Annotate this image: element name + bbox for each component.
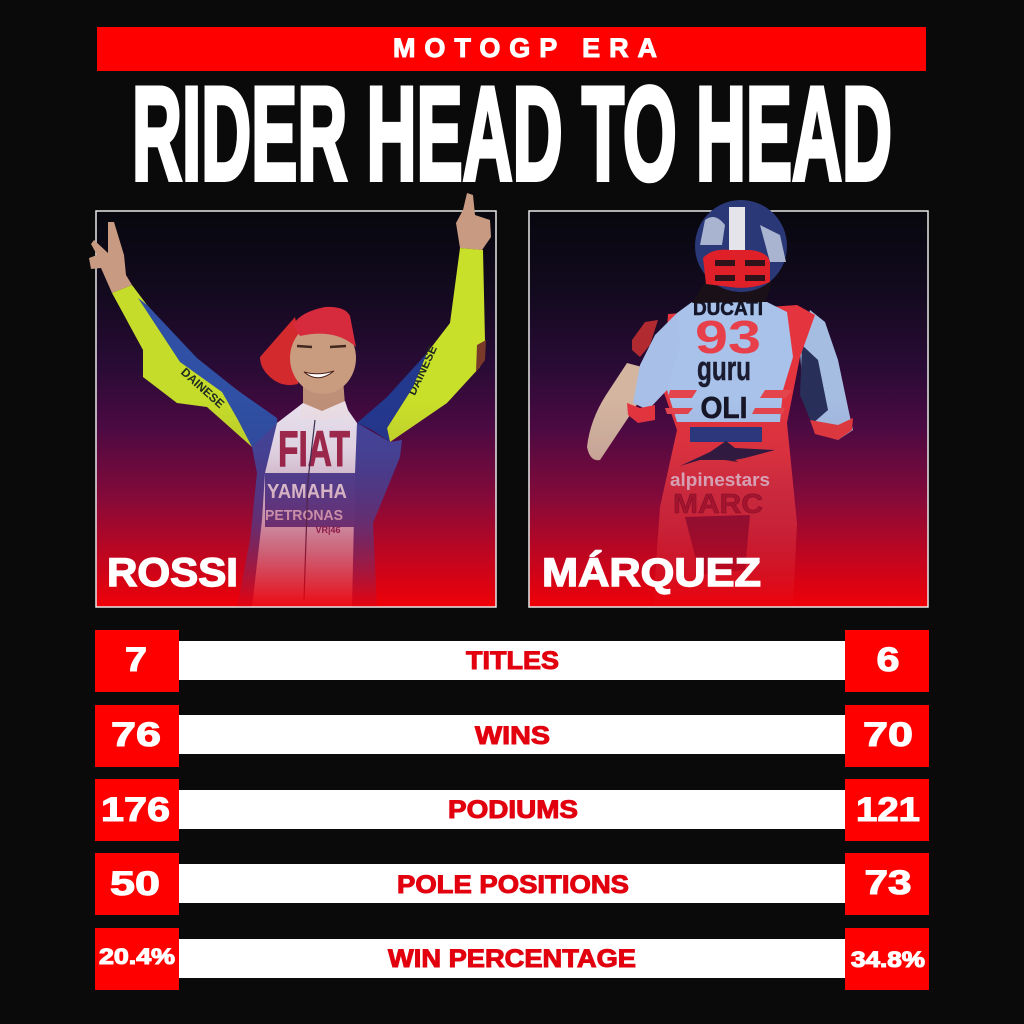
eyes and smile [297, 346, 346, 347]
left arm blue [633, 313, 680, 410]
stat row: pole positions [95, 853, 929, 915]
sponsor block [265, 473, 355, 527]
stripes [665, 390, 792, 414]
torso base [237, 423, 402, 607]
race number 93: 93 [695, 311, 761, 363]
stat row: podiums: 121 [856, 791, 920, 829]
right hand [456, 193, 491, 250]
left hand [89, 222, 132, 293]
helmet [695, 200, 787, 292]
face [290, 334, 356, 394]
sponsor text OLI: OLI [700, 390, 748, 425]
sponsor text guru: guru [697, 350, 751, 388]
sponsor text FIAT: FIAT [278, 421, 350, 477]
forearm [587, 363, 642, 460]
zip [304, 420, 315, 600]
right sleeve [387, 248, 485, 442]
header banner: MotoGP era [97, 27, 926, 71]
panel: Márquez [529, 200, 928, 607]
left shoulder blue [138, 298, 278, 447]
cap [293, 307, 356, 347]
sponsor text Dainese left sleeve: DAINESE [178, 365, 227, 411]
stat row: podiums [95, 779, 929, 841]
right shoulder blue [357, 353, 427, 442]
stat row: pole positions: 50 [110, 865, 160, 903]
stat row: win percentage: WIN PERCENTAGE [388, 945, 636, 973]
right arm [800, 310, 853, 440]
helmet highlights [700, 217, 786, 262]
stat row: titles: 7 [125, 641, 147, 679]
stat row: podiums: PODIUMS [448, 796, 578, 824]
chest white [252, 403, 357, 607]
stat row: win percentage: 20.4% [99, 944, 175, 969]
back light blue [667, 302, 793, 422]
left sleeve [112, 285, 253, 447]
panel: Rossi [89, 193, 496, 607]
sponsor text DUCATI: DUCATI [693, 298, 763, 320]
collar [692, 282, 772, 303]
sponsor text alpinestars: alpinestars [670, 470, 770, 490]
stat row: titles [95, 630, 929, 692]
stat row: titles: TITLES [466, 647, 559, 675]
stat row: win percentage: 34.8% [851, 947, 925, 972]
sponsor text PETRONAS: PETRONAS [265, 507, 343, 524]
stat row: wins: 70 [863, 716, 913, 754]
cap brim [260, 317, 300, 385]
sponsor text YAMAHA: YAMAHA [267, 481, 347, 503]
sponsor text MARC: MARC [673, 488, 763, 519]
rider name: Márquez: MÁRQUEZ [542, 550, 761, 595]
stat row: pole positions: POLE POSITIONS [397, 871, 629, 899]
stat row: wins: 76 [111, 716, 161, 754]
rider name: Rossi: ROSSI [107, 551, 238, 595]
stat row: pole positions: 73 [864, 864, 912, 902]
sponsor text Dainese right sleeve: DAINESE [405, 343, 440, 397]
seat shadow [685, 515, 750, 575]
left glove [627, 403, 655, 423]
stat row: wins: WINS [475, 722, 550, 750]
stat row: titles: 6 [876, 641, 900, 679]
torso red [653, 305, 815, 607]
stat row: win percentage [95, 928, 929, 990]
helmet rear panel [703, 250, 770, 288]
sponsor patch [690, 427, 762, 442]
far glove [632, 320, 658, 357]
stat row: podiums: 176 [101, 791, 170, 829]
helmet dark details [715, 260, 765, 281]
sponsor text VR46: VR|46 [315, 525, 341, 535]
stat row: wins [95, 705, 929, 767]
neck [303, 386, 345, 411]
figure: Márquez from behind [587, 200, 853, 607]
alpinestars logo [680, 441, 775, 466]
header banner: MotoGP era: MOTOGP ERA [393, 33, 657, 63]
helmet stripe [729, 207, 745, 253]
figure: Rossi celebrating [89, 193, 491, 607]
